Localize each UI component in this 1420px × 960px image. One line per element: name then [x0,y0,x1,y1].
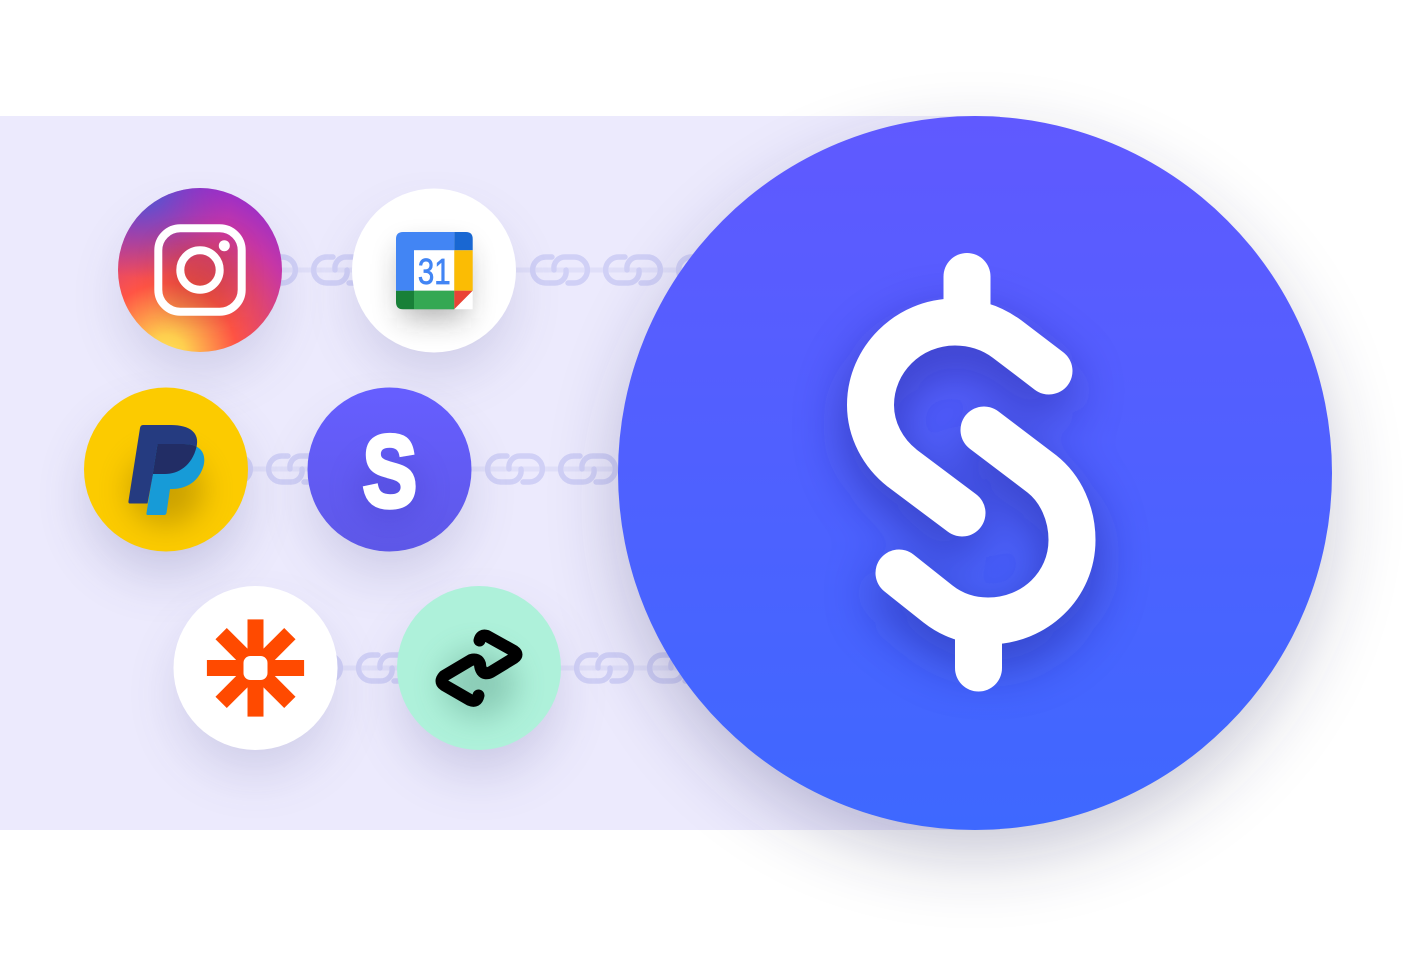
background band [0,116,1000,830]
chain row 2 [196,456,688,482]
icon: exchange arrows [442,636,516,701]
chain row 3 [286,655,715,681]
icon: paypal [128,425,204,515]
icon: calendar [396,232,473,309]
stripe badge [308,388,472,572]
big dollar circle [618,116,1332,850]
exchange badge [397,586,561,770]
icon: instagram glyph [158,228,242,312]
icon: zapier asterisk [207,619,304,717]
calendar date: 31 [418,251,451,291]
icon: letter S: S [363,414,417,529]
chain row 1 [241,257,733,283]
instagram badge [118,188,282,372]
infographic canvas [0,109,1363,892]
zapier badge [174,586,338,770]
paypal badge [84,388,248,572]
icon: dollar sign [870,276,1072,668]
google calendar badge [352,188,516,372]
